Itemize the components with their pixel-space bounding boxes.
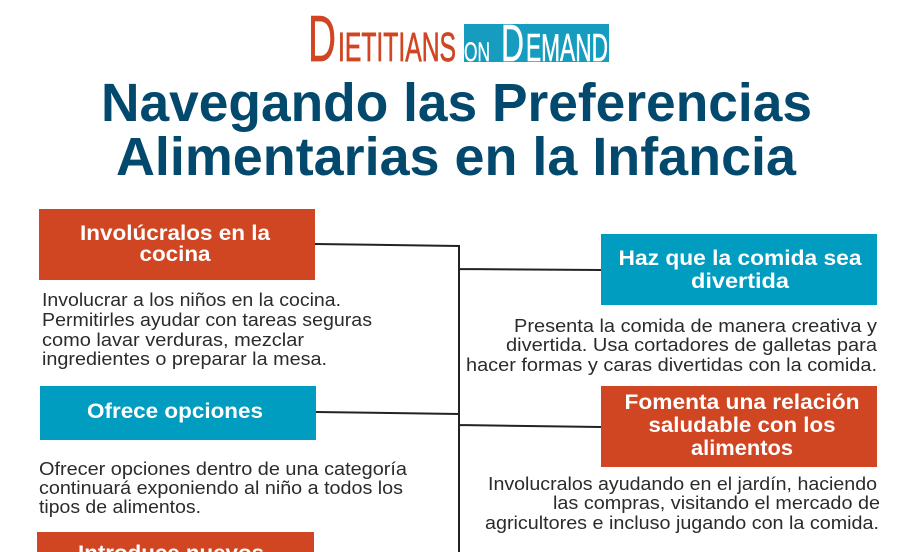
panel: ofrece opciones: Ofrece opciones xyxy=(87,400,263,423)
panel: ofrece opciones xyxy=(40,386,316,440)
panel: haz que la comida sea divertida: Haz que la comida sea xyxy=(618,247,862,270)
text: involúcralos xyxy=(42,290,372,369)
panel: fomenta una relación saludable: saludable con los xyxy=(648,414,836,437)
panel: haz que la comida sea divertida xyxy=(601,234,877,305)
logo word: Dietitians: D xyxy=(308,2,336,75)
logo: EMAND xyxy=(526,27,608,70)
text: fomenta una relación saludable: Involucralos ayudando en el jardín, haciendo xyxy=(488,474,877,494)
title: Navegando las Preferencias xyxy=(101,73,812,133)
text: involúcralos: como lavar verduras, mezclar xyxy=(42,330,304,350)
text: fomenta una relación saludable: agricultores e incluso jugando con la comida. xyxy=(485,513,879,533)
text: ofrece opciones: tipos de alimentos. xyxy=(39,497,201,517)
text: involúcralos: Involucrar a los niños en la cocina. xyxy=(42,290,341,310)
panel: involúcralos en la cocina: Involúcralos en la xyxy=(80,222,270,245)
logo box xyxy=(464,24,609,62)
panel: fomenta una relación saludable: alimentos xyxy=(691,437,793,460)
text: involúcralos: Permitirles ayudar con tareas seguras xyxy=(42,310,372,330)
text: haz que la comida sea divertida: hacer formas y caras divertidas con la comida. xyxy=(466,355,877,375)
logo: IETITIANS xyxy=(338,24,456,70)
title xyxy=(101,73,812,187)
panel: fomenta una relación saludable xyxy=(601,386,877,467)
logo: D xyxy=(501,15,524,73)
logo xyxy=(308,2,609,75)
panel: involúcralos en la cocina: cocina xyxy=(140,243,211,266)
panel: fomenta una relación saludable: Fomenta una relación xyxy=(624,391,860,414)
text: fomenta una relación saludable xyxy=(485,474,880,533)
text: ofrece opciones: continuará exponiendo al niño a todos los xyxy=(39,478,403,498)
text: ofrece opciones: Ofrecer opciones dentro de una categoría xyxy=(39,459,408,479)
logo word: on Demand: ON xyxy=(464,37,490,67)
title: Alimentarias en la Infancia xyxy=(116,127,797,187)
text: haz que la comida sea divertida: divertida. Usa cortadores de galletas para xyxy=(506,335,878,355)
text: fomenta una relación saludable: las compras, visitando el mercado de xyxy=(553,493,880,513)
connector lines xyxy=(315,244,601,552)
panel: haz que la comida sea divertida: divertida xyxy=(691,270,789,293)
text: ofrece opciones xyxy=(39,459,408,517)
text: haz que la comida sea divertida xyxy=(466,316,878,375)
panel: involúcralos en la cocina xyxy=(39,209,315,280)
text: involúcralos: ingredientes o preparar la mesa. xyxy=(42,349,327,369)
panel: introduce nuevos xyxy=(37,532,314,552)
text: haz que la comida sea divertida: Presenta la comida de manera creativa y xyxy=(514,316,877,336)
